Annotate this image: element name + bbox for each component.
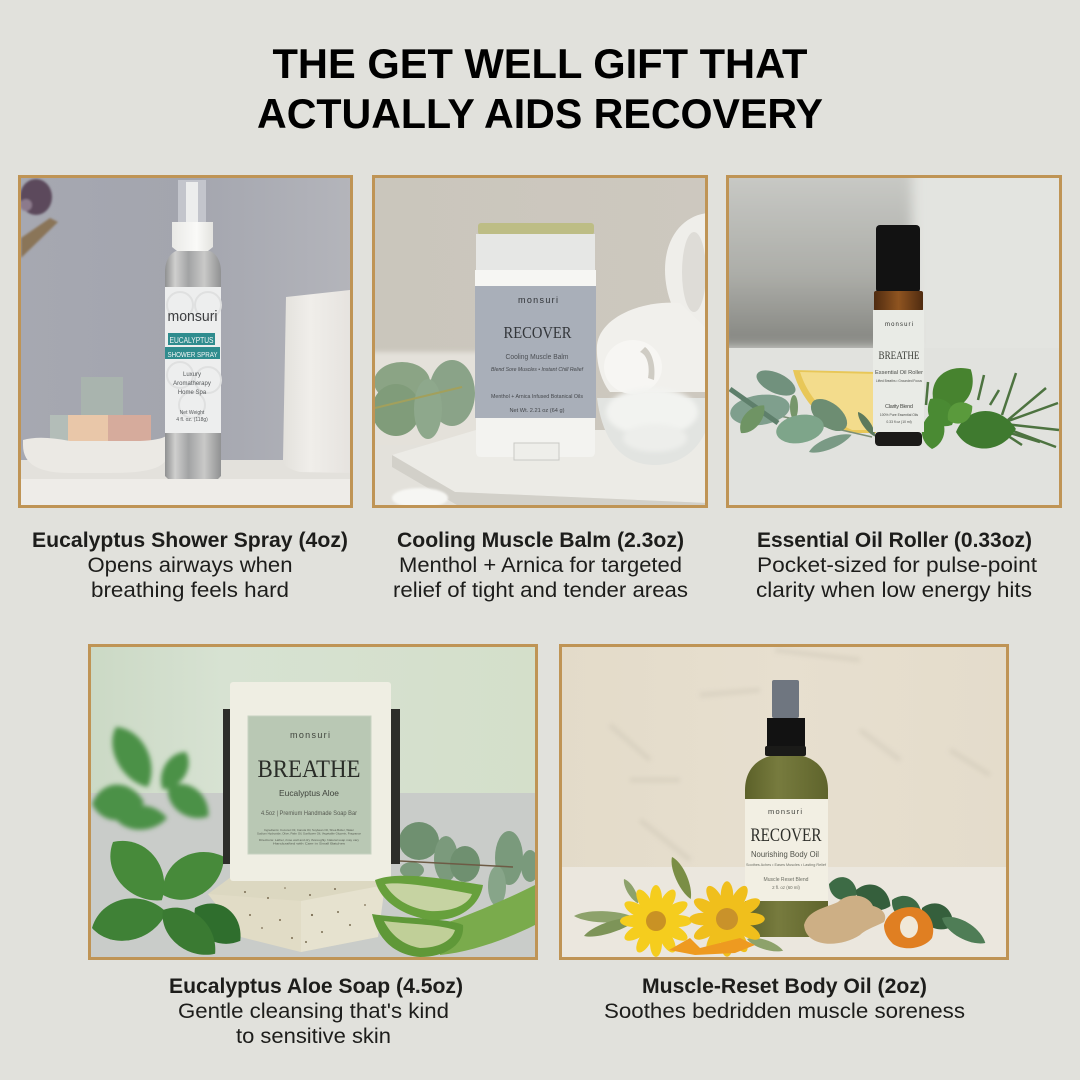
table	[559, 867, 1009, 960]
eucalyptus sprig	[372, 360, 475, 439]
mint leaves	[922, 368, 1016, 449]
caption: eucalyptus aloe soap: to sensitive skin	[236, 1024, 391, 1048]
soap box: monsuri	[290, 730, 330, 740]
speckled soap bar	[208, 877, 385, 952]
panel border	[20, 176, 352, 506]
oil bottle: RECOVER	[750, 825, 822, 846]
toilet paper roll	[283, 290, 350, 473]
spray bottle	[165, 180, 221, 479]
oil bottle: Muscle Reset Blend	[764, 877, 808, 883]
caption: eucalyptus shower spray: breathing feels hard	[91, 578, 289, 602]
caption: eucalyptus aloe soap	[169, 975, 463, 1048]
spray bottle: 4 fl. oz. (118g)	[176, 417, 208, 423]
balm stick: RECOVER	[504, 323, 572, 342]
marble wall	[559, 644, 1009, 868]
spray bottle: EUCALYPTUS	[170, 336, 214, 345]
marble veins	[636, 650, 896, 858]
blurred wall	[88, 644, 538, 794]
caption: cooling muscle balm	[393, 529, 688, 602]
wall	[375, 178, 705, 430]
title: ACTUALLY AIDS RECOVERY	[257, 90, 823, 137]
bright wall	[726, 175, 1062, 350]
greens right	[825, 873, 990, 950]
ginger root	[804, 896, 885, 944]
icon: dried flowers	[20, 179, 58, 258]
oil bottle	[745, 680, 828, 937]
wall	[18, 175, 353, 465]
panel: cooling muscle balm photo	[372, 175, 708, 508]
soap box: Handcrafted with Care in Small Batches	[273, 842, 346, 846]
roller bottle: 0.33 fl oz (10 ml)	[886, 420, 912, 424]
caption: cooling muscle balm: Cooling Muscle Balm (2.3oz)	[397, 529, 684, 552]
caption: essential oil roller: Essential Oil Roller (0.33oz)	[757, 529, 1032, 552]
panel: eucalyptus aloe soap photo	[88, 644, 539, 967]
soap tray with soap cubes	[23, 377, 165, 460]
caption: muscle-reset body oil	[604, 975, 965, 1023]
soap box: Ingredients: Coconut Oil, Canola Oil, Soybean Oil, Shea Butter, Water	[264, 828, 354, 832]
roller bottle: monsuri	[885, 322, 913, 328]
caption: essential oil roller: clarity when low energy hits	[756, 578, 1032, 602]
panel: muscle-reset body oil photo	[559, 644, 1009, 960]
eucalyptus sprig	[399, 822, 539, 906]
caption: eucalyptus aloe soap: Gentle cleansing that's kind	[178, 999, 449, 1023]
bowl of ice crystals	[597, 388, 708, 465]
balm stick	[475, 223, 596, 460]
roller bottle: 100% Pure Essential Oils	[880, 413, 918, 417]
spray bottle: Aromatherapy	[173, 381, 211, 387]
spray bottle: Home Spa	[178, 390, 207, 396]
oil bottle: 2 fl. oz (60 ml)	[772, 885, 800, 890]
towels	[597, 213, 708, 394]
caption: eucalyptus shower spray	[32, 529, 348, 602]
lemon	[793, 370, 876, 433]
balm stick: Blend Sore Muscles • Instant Chill Relief	[491, 367, 583, 373]
aloe leaves	[372, 876, 535, 957]
balm stick: Net Wt. 2.21 oz (64 g)	[510, 408, 565, 414]
caption: muscle-reset body oil: Soothes bedridden muscle soreness	[604, 999, 965, 1023]
spray bottle: Luxury	[183, 372, 201, 378]
roller bottle: Lifted Breaths • Grounded Focus	[876, 379, 922, 383]
oil bottle: Nourishing Body Oil	[751, 850, 819, 859]
panel: essential oil roller photo	[729, 178, 1059, 453]
soap box: Sodium Hydroxide, Olive, Palm Oil, Sunflower Oil, Vegetable Glycerin, Fragrance	[257, 832, 361, 836]
lower counter	[372, 445, 708, 508]
caption: muscle-reset body oil: Muscle-Reset Body Oil (2oz)	[642, 975, 927, 998]
caption: essential oil roller	[756, 529, 1037, 602]
lower mint	[92, 840, 241, 955]
spray bottle: Net Weight	[180, 410, 205, 416]
caption: eucalyptus shower spray: Eucalyptus Shower Spray (4oz)	[32, 529, 348, 552]
caption: cooling muscle balm: Menthol + Arnica for targeted	[399, 553, 682, 577]
soap box: 4.5oz | Premium Handmade Soap Bar	[261, 810, 358, 817]
panel border	[90, 646, 536, 958]
rosemary	[926, 373, 1059, 447]
soap box: Directions: Lather, rinse well and dry thoroughly. Natural soap may vary	[259, 838, 360, 842]
spray bottle: SHOWER SPRAY	[168, 350, 218, 359]
marble slab	[392, 430, 708, 508]
shaded wall	[729, 178, 917, 348]
soap box	[223, 682, 400, 881]
eucalyptus leaves	[729, 370, 875, 453]
spray bottle: monsuri	[168, 308, 218, 325]
balm stick: Menthol + Arnica Infused Botanical Oils	[491, 394, 583, 400]
panel border	[560, 646, 1008, 958]
balm stick: monsuri	[518, 295, 558, 305]
caption: essential oil roller: Pocket-sized for pulse-point	[757, 553, 1037, 577]
oil bottle: monsuri	[768, 807, 802, 816]
caption: eucalyptus shower spray: Opens airways when	[88, 553, 292, 577]
caption: eucalyptus aloe soap: Eucalyptus Aloe Soap (4.5oz)	[169, 975, 463, 998]
caption: cooling muscle balm: relief of tight and tender areas	[393, 578, 688, 602]
panel border	[728, 176, 1060, 506]
back counter	[375, 350, 476, 445]
balm stick: Cooling Muscle Balm	[506, 354, 569, 361]
table	[729, 348, 873, 356]
soap box: BREATHE	[258, 756, 360, 783]
title: THE GET WELL GIFT THAT	[272, 40, 808, 87]
marigold flowers	[620, 881, 765, 957]
panel border	[374, 176, 706, 506]
roller bottle: Clarity Blend	[885, 404, 913, 410]
panel: eucalyptus shower spray photo	[18, 175, 353, 508]
table	[88, 793, 538, 960]
upper blurred mint	[91, 719, 217, 830]
oil bottle: Soothes Aches • Eases Muscles • Lasting Relief	[746, 863, 827, 867]
roller bottle	[873, 225, 924, 446]
orange peel	[884, 907, 933, 948]
roller bottle: Essential Oil Roller	[875, 370, 923, 376]
shelf	[18, 460, 353, 508]
title	[257, 40, 823, 137]
greens left	[574, 855, 785, 955]
roller bottle: BREATHE	[878, 348, 920, 362]
soap box: Eucalyptus Aloe	[279, 788, 339, 798]
